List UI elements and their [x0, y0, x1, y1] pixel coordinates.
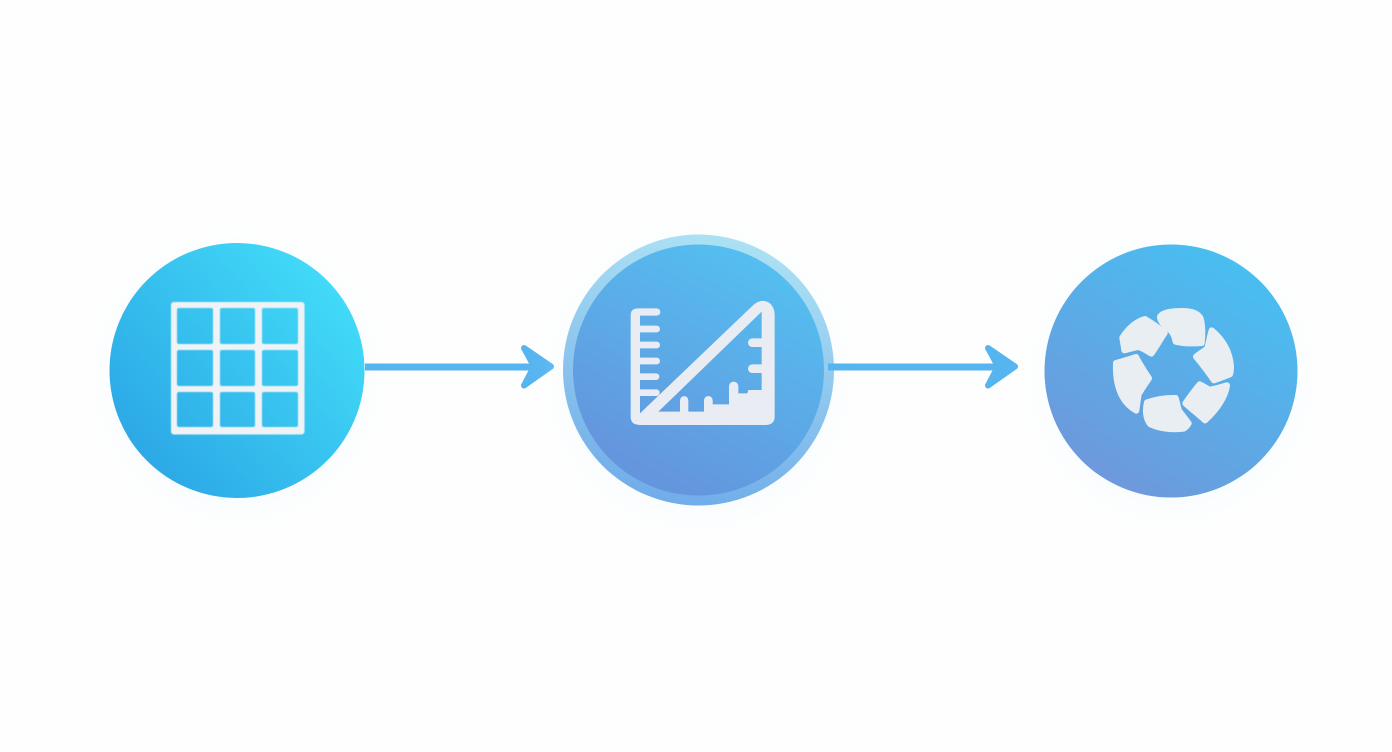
step 1: grid circle — [107, 243, 367, 508]
icon: set square and ruler — [631, 301, 775, 425]
icon: grid table — [171, 302, 304, 434]
step 2: ruler circle — [560, 234, 836, 516]
step 3: recycle circle — [1042, 244, 1300, 508]
icon: circular recycle segments — [1116, 311, 1231, 429]
arrow: step 1 to step 2 — [365, 348, 551, 386]
arrow: step 2 to step 3 — [828, 348, 1015, 386]
